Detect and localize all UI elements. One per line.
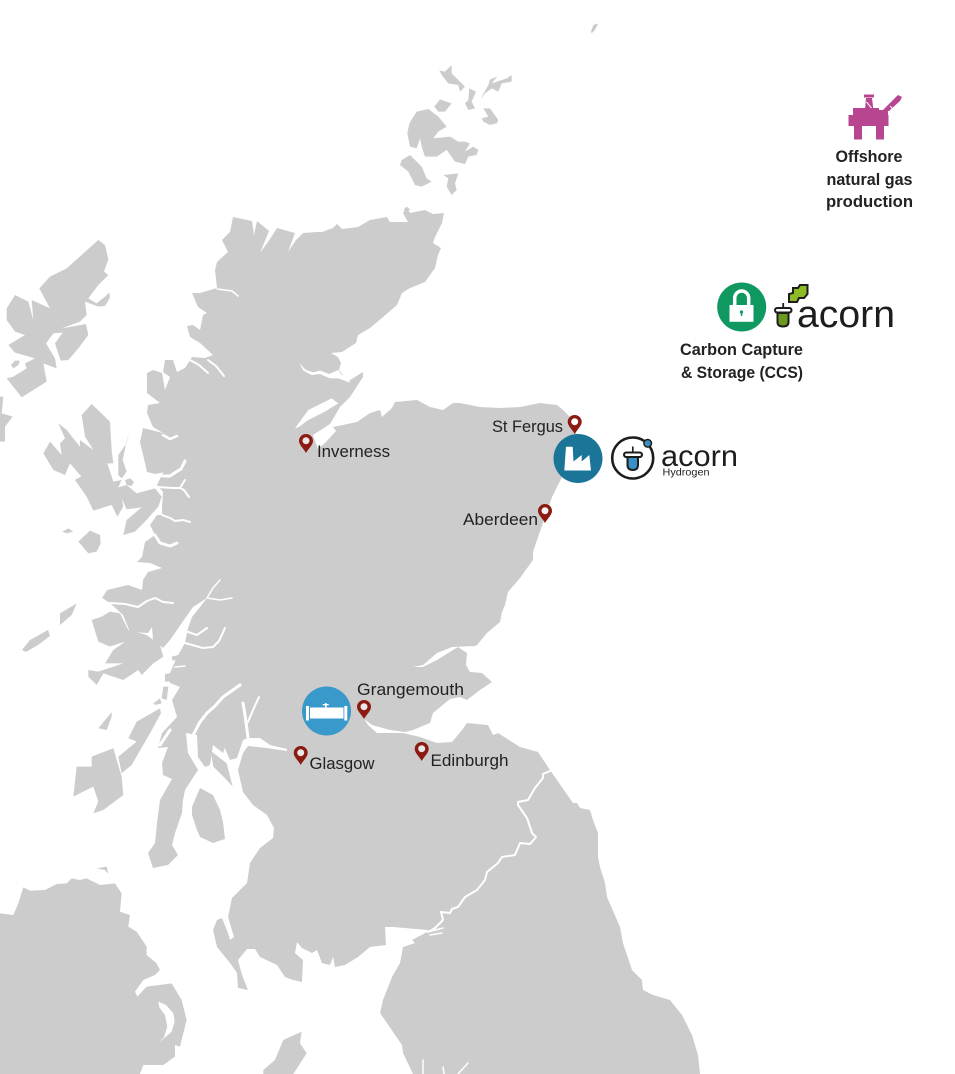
pin: St Fergus — [568, 415, 582, 434]
logo sub label: Hydrogen — [662, 466, 710, 478]
logo wordmark: acorn — [797, 294, 895, 336]
logo acorn nut with leaf — [775, 285, 808, 326]
logo dot — [644, 440, 652, 447]
label: Carbon Capture & Storage (CCS): & Storage (CCS) — [681, 364, 803, 382]
label: Offshore natural gas production — [826, 148, 913, 211]
pin: Inverness — [299, 434, 313, 453]
Ireland, Isle of Man and Rathlin — [0, 867, 307, 1074]
logo ring — [612, 438, 653, 478]
islands: Skye and Small Isles — [43, 404, 162, 553]
islands: Orkney and Fair Isle — [400, 23, 598, 210]
label: Grangemouth: Grangemouth — [357, 680, 464, 699]
pin: Glasgow — [294, 746, 308, 765]
pin: Aberdeen — [538, 504, 552, 523]
label: Carbon Capture & Storage (CCS) — [680, 341, 803, 382]
logo: Acorn Hydrogen — [612, 438, 738, 478]
label: Inverness: Inverness — [317, 442, 390, 461]
icon: factory circle — [554, 434, 602, 483]
label: St Fergus: St Fergus — [492, 417, 563, 436]
pin: Grangemouth — [357, 700, 371, 719]
islands: Mull, Jura, Islay, Bute and the Firth of Lorn — [60, 603, 233, 813]
label: Offshore natural gas production: production — [826, 193, 913, 211]
label: Glasgow: Glasgow — [310, 754, 375, 773]
label: Aberdeen: Aberdeen — [463, 510, 538, 529]
island: Arran — [192, 788, 225, 843]
logo wordmark: acorn — [661, 440, 738, 473]
sea lochs and firths cut into the land — [110, 289, 550, 1074]
firth cut-outs: Dornoch and Cromarty — [295, 363, 350, 428]
logo acorn nut — [624, 446, 642, 470]
label: Offshore natural gas production: natural gas — [826, 171, 912, 189]
icon: lock circle — [717, 282, 766, 332]
pin: Edinburgh — [415, 742, 429, 761]
icon: pipeline circle — [302, 686, 351, 736]
label: Offshore natural gas production: Offshore — [836, 148, 902, 166]
island: Tiree — [22, 630, 50, 652]
logo: Acorn — [775, 285, 895, 336]
map: Scotland and northern England landmass — [0, 23, 700, 1074]
islands: Outer Hebrides — [0, 240, 110, 442]
label: Carbon Capture & Storage (CCS): Carbon Capture — [680, 341, 803, 359]
label: Edinburgh: Edinburgh — [430, 751, 508, 770]
icon: offshore oil rig — [848, 94, 902, 140]
